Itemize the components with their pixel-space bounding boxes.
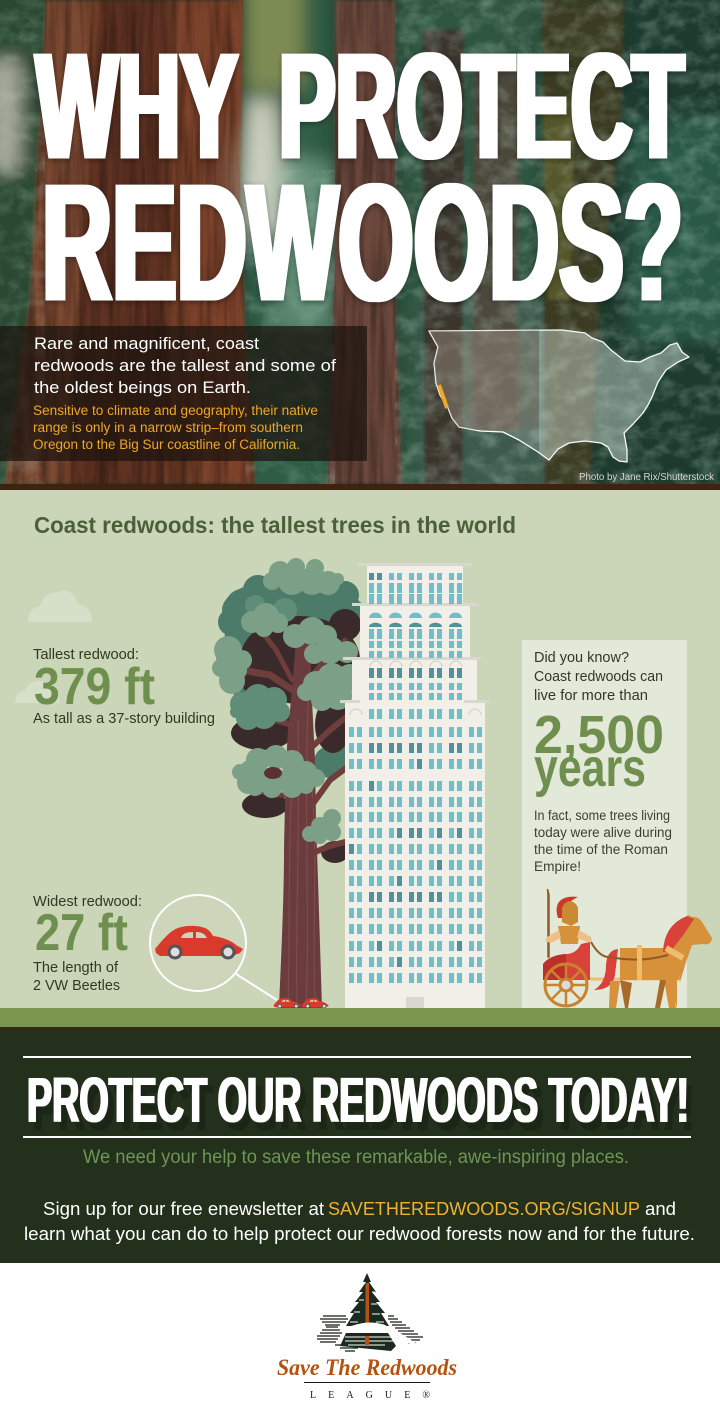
panel: intro text box: Sensitive to climate and geography, their native	[33, 403, 318, 418]
text: tallest redwood: Tallest redwood:	[33, 647, 139, 663]
title: why protect redwoods: WHY	[36, 21, 238, 190]
subheading: We need your help to save these remarkable, awe-inspiring places.	[83, 1147, 629, 1168]
panel: tallest trees background	[0, 484, 720, 1008]
panel: did you know: Coast redwoods can	[534, 669, 663, 685]
heading: tallest trees: Coast redwoods: the tallest trees in the world	[34, 512, 516, 538]
illustration: redwood tree	[212, 558, 369, 1008]
panel: intro text box: range is only in a narrow strip–from southern	[33, 420, 303, 435]
panel: did you know: Did you know?	[534, 650, 629, 666]
panel: did you know: Empire!	[534, 859, 581, 874]
text: sign up: Sign up for our free enewsletter at	[43, 1198, 324, 1219]
text: sign up	[24, 1198, 695, 1244]
logo: Save The Redwoods League: LEAGUE®	[310, 1390, 430, 1401]
panel: intro text box: Oregon to the Big Sur coastline of California.	[33, 437, 300, 452]
panel: did you know: the time of the Roman	[534, 842, 668, 857]
text: sign up: SAVETHEREDWOODS.ORG/SIGNUP	[328, 1198, 640, 1219]
panel: intro text box: the oldest beings on Earth.	[34, 378, 251, 397]
illustration: roman chariot	[543, 889, 712, 1008]
text: tallest redwood: 379 ft	[34, 658, 155, 716]
text: tallest redwood: As tall as a 37-story building	[33, 711, 215, 727]
text: widest redwood	[33, 894, 142, 994]
panel: intro text box: Rare and magnificent, coast	[34, 334, 259, 353]
panel: did you know: 2,500	[534, 705, 664, 765]
text: widest redwood: 2 VW Beetles	[33, 978, 120, 994]
text: widest redwood: 27 ft	[35, 904, 128, 962]
illustration: building	[340, 563, 490, 1008]
panel: did you know: years	[534, 738, 646, 798]
title: why protect redwoods	[36, 21, 684, 336]
text: widest redwood: The length of	[33, 960, 119, 976]
logo: Save The Redwoods League	[277, 1273, 457, 1401]
panel: intro text box: redwoods are the tallest and some of	[34, 356, 336, 375]
icon: cloud	[28, 590, 92, 622]
text: sign up: and	[645, 1198, 676, 1219]
logo: Save The Redwoods League: Save The Redwoods	[277, 1355, 457, 1380]
callout: beetle magnifier	[150, 895, 277, 1000]
ground	[0, 1008, 720, 1030]
panel: did you know: In fact, some trees living	[534, 808, 670, 823]
panel: did you know	[522, 640, 687, 1008]
canopy gap	[264, 767, 282, 779]
panel: did you know: live for more than	[534, 688, 648, 704]
icon: small cloud	[15, 681, 60, 703]
text: widest redwood: Widest redwood:	[33, 894, 142, 910]
icon: two beetles at the trunk	[274, 998, 329, 1008]
panel: intro text box	[0, 326, 367, 461]
text: tallest redwood	[33, 647, 215, 727]
trunk of the redwood	[279, 640, 322, 1008]
building windows	[349, 573, 482, 983]
text: sign up: learn what you can do to help protect our redwood forests now and for the future.	[24, 1223, 695, 1244]
panel: call to action	[0, 1030, 720, 1263]
snowy hill	[340, 1323, 420, 1346]
map: United States with redwood range	[429, 330, 691, 465]
panel: footer	[0, 1263, 720, 1414]
panel: hero photo	[0, 0, 720, 500]
panel: did you know: today were alive during	[534, 825, 672, 840]
